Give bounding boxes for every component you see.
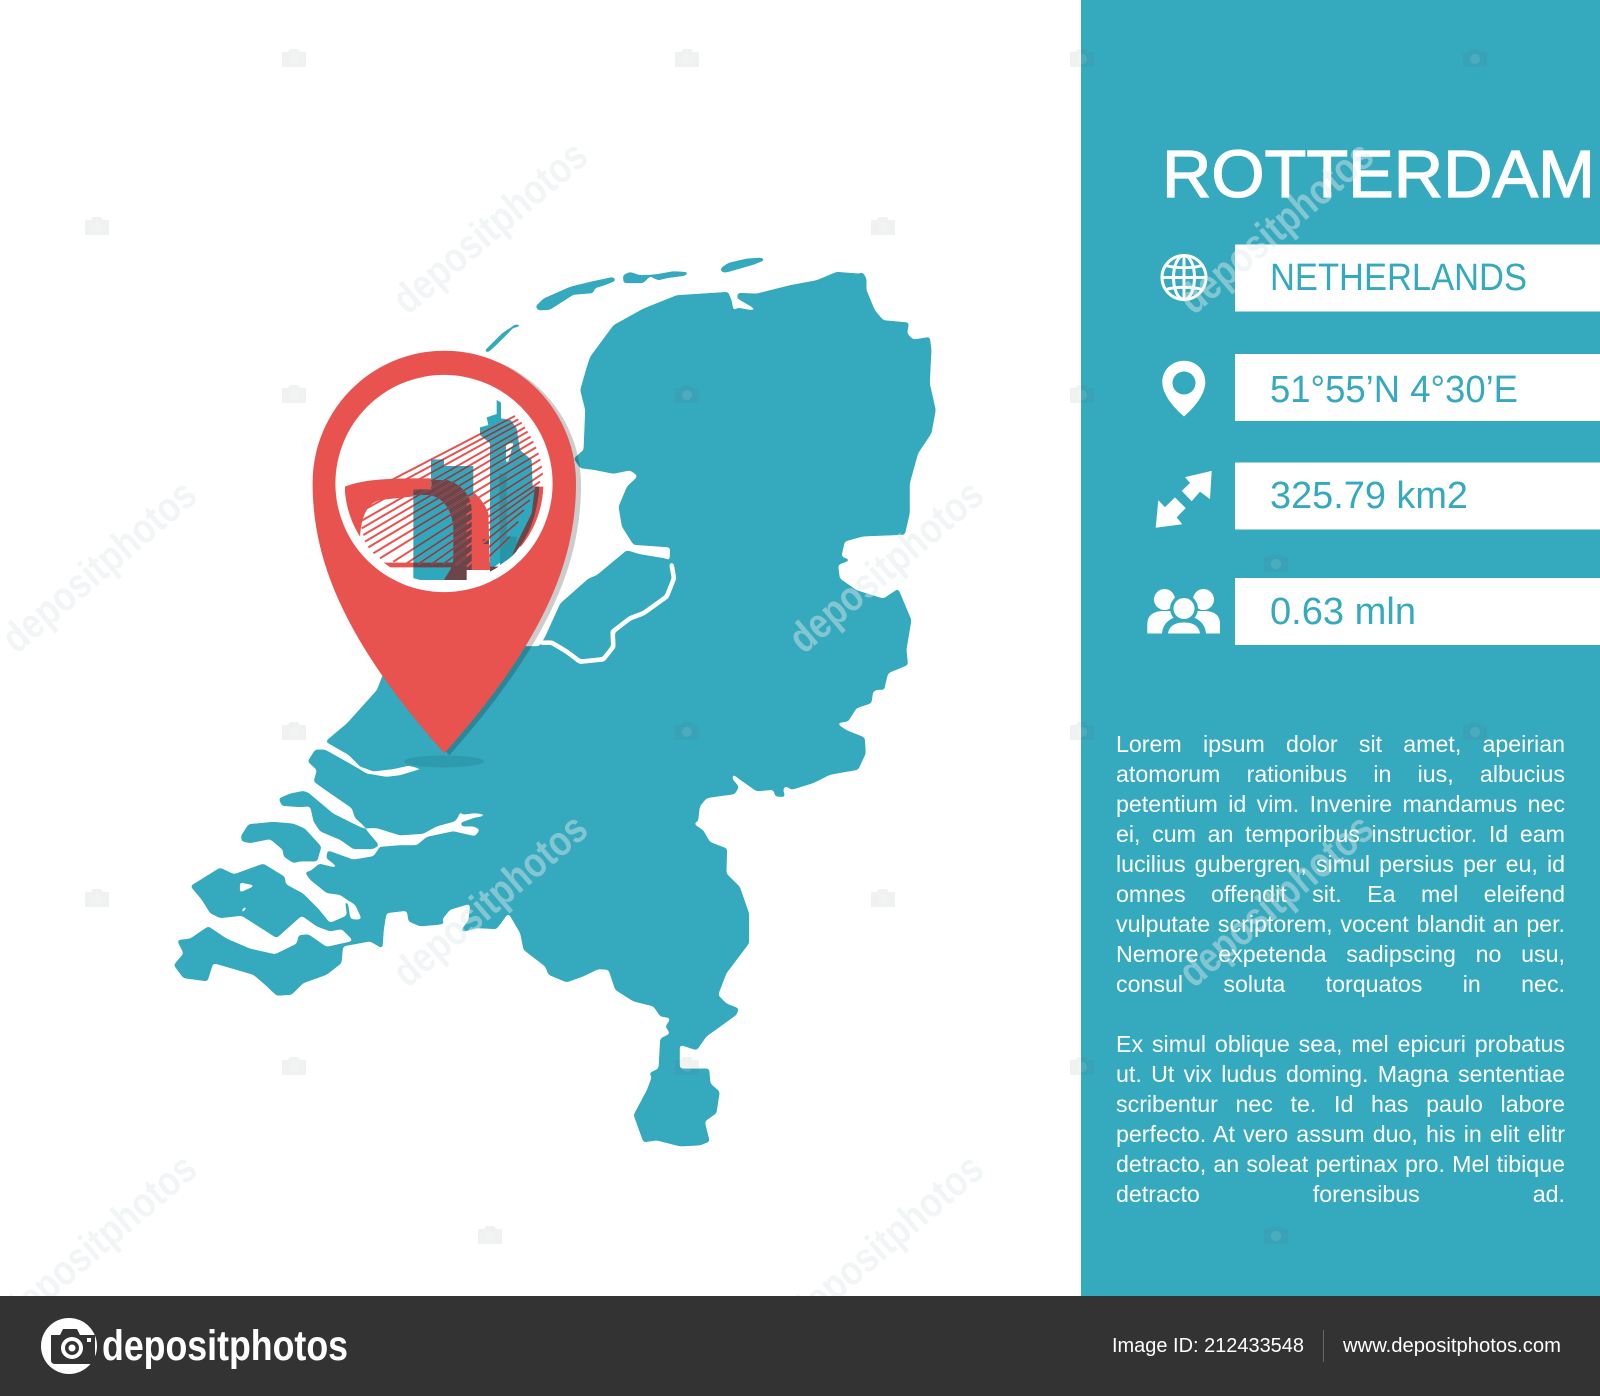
Wadden islands [483, 257, 766, 353]
icon: resize arrows [1156, 471, 1212, 528]
text block: second paragraph: detracto forensibus ad. [1116, 1181, 1565, 1207]
land beneath the pin [460, 646, 548, 700]
southeastern landmass and Limburg [500, 670, 887, 1147]
northern and eastern landmass [513, 272, 936, 690]
text block: first paragraph: omnes offendit sit. Ea mel eleifend [1116, 881, 1565, 907]
text block: second paragraph: Ex simul oblique sea, mel epicuri probatus [1116, 1031, 1565, 1057]
website address: www.depositphotos.com [1342, 1335, 1561, 1357]
text block: second paragraph [1116, 1031, 1565, 1207]
diagonal stock watermarks and camera marks: depositphotos [1169, 131, 1382, 323]
panel: city facts [1081, 0, 1600, 1296]
row: population [1235, 578, 1600, 645]
map of the Netherlands [174, 258, 936, 1146]
diagonal stock watermarks and camera marks: depositphotos [383, 131, 596, 323]
skyline illustration [343, 400, 547, 580]
text block: first paragraph: ei, cum an temporibus instructior. Id eam [1116, 821, 1565, 847]
text block: first paragraph: vulputate scriptorem, vocent blandit an per. [1116, 911, 1565, 937]
text block: first paragraph: lucilius gubergren, simul persius per eu, id [1116, 851, 1565, 877]
text block: second paragraph: scribentur nec te. Id has paulo labore [1116, 1091, 1565, 1117]
text block: first paragraph: Nemore expetenda sadipscing no usu, [1116, 941, 1565, 967]
delta: Holland coast north of the waterway [325, 630, 503, 773]
row: population: 0.63 mln [1270, 591, 1416, 633]
row: coordinates: 51°55’N 4°30’E [1270, 369, 1518, 411]
diagonal stock watermarks and camera marks: depositphotos [779, 470, 992, 662]
text block: second paragraph: perfecto. At vero assum duo, his in elit elitr [1116, 1121, 1565, 1147]
row: country: NETHERLANDS [1270, 257, 1527, 299]
icon: camera logo [41, 1318, 97, 1374]
diagonal stock watermarks and camera marks: depositphotos [383, 804, 596, 996]
text block: second paragraph: ut. Ut vix ludus doming. Magna sententiae [1116, 1061, 1565, 1087]
delta: Zeeuws-Vlaanderen [173, 926, 370, 996]
text block: first paragraph [1116, 731, 1565, 997]
delta: island south of the waterway [307, 749, 503, 836]
row: area [1235, 462, 1600, 530]
text block: first paragraph: petentium id vim. Invenire mandamus nec [1116, 791, 1565, 817]
text block: second paragraph: detracto, an soleat pertinax pro. Mel tibique [1116, 1151, 1565, 1177]
delta: Goeree island [278, 791, 379, 849]
row: area: 325.79 km2 [1270, 475, 1468, 517]
title: ROTTERDAM [1162, 137, 1595, 212]
image id: Image ID: 212433548 [1112, 1335, 1304, 1357]
water channels [240, 565, 674, 914]
text block: first paragraph: Lorem ipsum dolor sit amet, apeirian [1116, 731, 1565, 757]
icon: location pin [1162, 361, 1205, 416]
row: coordinates [1235, 354, 1600, 421]
location pin with Rotterdam skyline [313, 351, 581, 768]
delta: Schouwen island [241, 822, 322, 863]
text block: first paragraph: atomorum rationibus in ius, albucius [1116, 761, 1565, 787]
row: country [1235, 244, 1600, 312]
icon: globe [1162, 256, 1206, 300]
logo wordmark: depositphotos [102, 1322, 348, 1370]
text block: first paragraph: consul soluta torquatos in nec. [1116, 971, 1565, 997]
delta: inlet wedge [460, 813, 503, 832]
diagonal stock watermarks and camera marks: depositphotos [1169, 804, 1382, 996]
delta: Brabant and Beveland [190, 830, 508, 949]
footer bar [0, 1296, 1600, 1396]
icon: people [1147, 589, 1220, 634]
diagonal stock watermarks and camera marks: depositphotos [779, 1144, 992, 1336]
